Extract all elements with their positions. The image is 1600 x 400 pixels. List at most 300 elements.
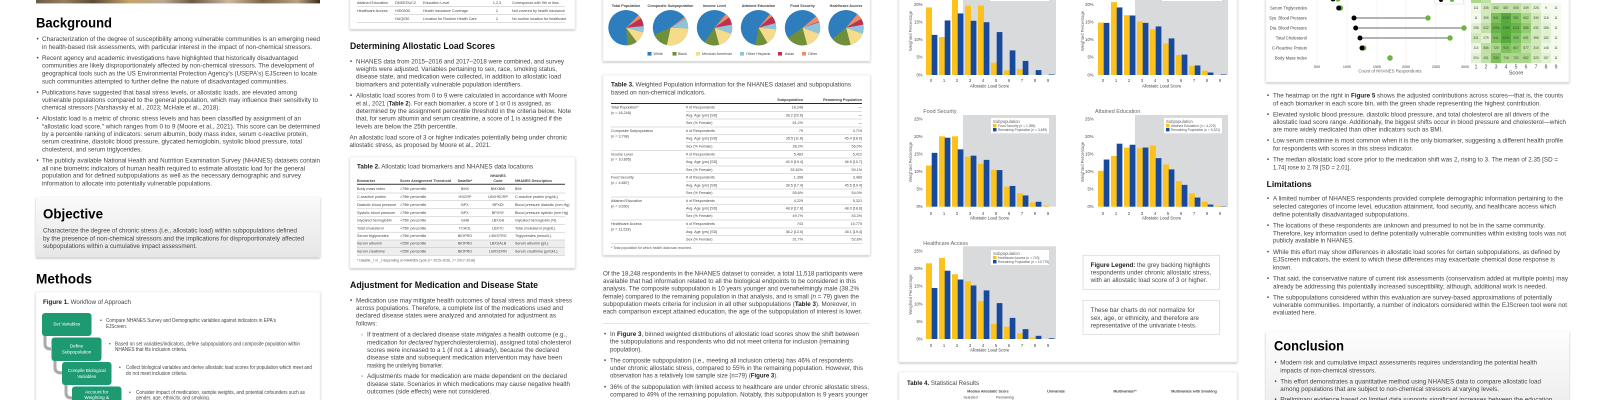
heatmap values: 1054 [1492, 26, 1500, 30]
legend: healthcare access [991, 250, 1049, 265]
table 4 header [963, 390, 1217, 400]
chart: attained education: 0 [1102, 211, 1105, 216]
table 4 header: Multivariate** [1113, 390, 1137, 394]
chart: income level: 0 [1102, 78, 1105, 83]
workflow arrows [45, 335, 72, 398]
table 3 rows: 52.8% [852, 238, 863, 242]
table 3 rows: — [858, 106, 862, 110]
lollipop x axis: 1500 [1373, 65, 1381, 69]
heatmap values: 941 [1493, 36, 1499, 40]
lollipop x axis: 1000 [1343, 65, 1351, 69]
heatmap x axis: 2 [1485, 65, 1488, 71]
lollipop legend [1435, 0, 1463, 4]
table 3 rows: Healthcare Access [611, 222, 642, 226]
heatmap values: 991 [1513, 16, 1519, 20]
table 4 header: Multivariate with Smoking [1171, 390, 1217, 394]
text block: figure 5 bullets: Elevated systolic blood pressure, diastolic blood pressure, and total cholesterol are all drivers of the [1273, 111, 1550, 118]
text block: limitations: While this effort may show differences in allostatic load scores for certain subpopulations, as defined by [1273, 249, 1561, 256]
chart: income level: Weighted Percentage [1080, 10, 1085, 51]
text block: figure 5 bullets: 1.74] rose to 2.78 [SD = 2.01]. [1273, 164, 1351, 171]
chart: income level: 4 [1154, 78, 1157, 83]
heatmap values: 349 [1523, 6, 1529, 10]
heatmap values: 118 [1543, 16, 1549, 20]
panel: ethnicity pie charts [603, 0, 870, 61]
panel: table 1 fragment: DMDEDUC2 [395, 1, 416, 5]
text block: limitations: The locations of these respondents are unknown and presumed to not be in the same community. [1273, 223, 1545, 230]
text block: background bullets: in health-based risk assessments, with particular interest in the impact of non-chemical stressors. [42, 44, 312, 51]
table 4 header: Remaining [996, 396, 1014, 400]
table 3 rows: 5,321 [853, 199, 862, 203]
table 2 rows: >75th percentile [400, 203, 426, 207]
table 3 rows: Avg. Age (yrs) [SD] [686, 113, 717, 117]
table 3 rows: Sex (% Female) [686, 214, 712, 218]
lollipop labels: C-Reactive Protein [1272, 45, 1308, 50]
callout: figure legend: with an allostatic load score of 3 or higher. [1090, 277, 1208, 284]
table 3 rows: (n = 18,248) [611, 111, 631, 115]
heatmap values: 505 [1513, 6, 1519, 10]
table 2 rows: >75th percentile [400, 226, 426, 230]
heatmap values: 258 [1473, 26, 1479, 30]
heatmap [1471, 0, 1561, 76]
chart: food security: 10% [914, 169, 923, 174]
chart: attained education: 9 [1219, 211, 1222, 216]
text block: limitations: That said, the conservative nature of current risk assessments (conservatism added at multiple points) may [1273, 276, 1569, 283]
text block: limitations: vulnerable communities. Importantly, a number of indicators considered within the EJScreen tool were not [1273, 302, 1567, 309]
chart: food security: 1 [943, 211, 946, 216]
heatmap x axis: 5 [1515, 65, 1518, 71]
text block: adjustment: across populations. Therefore, a complete list of the medications used and [356, 305, 563, 312]
table 3 rows: 48.8 [17.8] [786, 207, 803, 211]
chart: healthcare access: 25% [914, 248, 923, 253]
table 3 rows: 79 [799, 129, 803, 133]
heatmap x axis: 6 [1525, 65, 1528, 71]
panel: table 3 [603, 75, 870, 255]
table 3 rows: (n = 10,895) [611, 158, 631, 162]
text block: limitations: A limited number of NHANES respondents provided complete demographic information pertaining to the [1273, 195, 1564, 202]
chart: income level: 3 [1141, 78, 1144, 83]
text block: determining scores: that, for serum albumin and serum creatinine, a score of 1 is assigned if the [356, 116, 563, 123]
workflow step descriptions: EJScreen. [106, 324, 127, 330]
panel: table 1 fragment: Location for Routine Health Care [423, 17, 477, 21]
table 2 rows: TCHOL [459, 226, 471, 230]
lollipop labels: Serum Triglycerides [1270, 5, 1307, 10]
table 3 rows: 3,489 [853, 176, 862, 180]
text block: adjustment [350, 297, 572, 396]
pie legend: Other [808, 52, 818, 56]
panel: table 1 fragment: Health Insurance Coverage [423, 9, 468, 13]
table 2 rows: >75th percentile [400, 234, 426, 238]
table 3 header: Remaining Population [823, 98, 863, 102]
heatmap values: 156 [1543, 26, 1549, 30]
callout: univariate note [1083, 300, 1220, 334]
table 3 rows: 38.5 [17.4] [786, 183, 803, 187]
pie titles: Income Level [703, 4, 726, 8]
text block: determining scores: levels are below the 25th percentile. [356, 123, 457, 130]
text block: results bullets: the subpopulations and respondents who did not meet criteria for inclusion (remaining [610, 339, 849, 346]
table 3 rows: Sex (% Female) [686, 121, 712, 125]
table 4 header: Median Allostatic Score [967, 390, 1009, 394]
table 3 rows: Sex (% Female) [686, 238, 712, 242]
heatmap x axis: 9 [1555, 65, 1558, 71]
heading: Objective: Objective [43, 206, 103, 221]
text block: background bullets: • [36, 55, 39, 62]
chart: attained education: 3 [1141, 211, 1144, 216]
chart: food security: 0% [916, 204, 923, 209]
panel: table 2 [350, 157, 575, 268]
text block: results bullets: • [604, 331, 606, 338]
text block: limitations: EJScreen indicators, the extent to which these differences may exacerbate chemical dose response is [1273, 257, 1555, 264]
text block: determining scores: Allostatic load scores from 0 to 9 were calculated in accordance with Moore [356, 93, 568, 100]
text block: background bullets: vulnerable populations compared to the general population, which may influence their sensitivity to [42, 97, 319, 104]
panel: table 1 fragment: 2 [496, 9, 498, 13]
legend: food security: Remaining Population (n = 3,489) [998, 128, 1047, 132]
text block: background bullets: information to allocate into potentially vulnerable populations. [42, 181, 212, 188]
text block: adjustment: medication for declared hypercholesterolemia), assigned total cholesterol [367, 339, 571, 346]
heading: conclusion: Conclusion [1274, 338, 1344, 354]
pie legend: Other Hispanic [746, 52, 771, 56]
chart: attained education: 0% [1087, 204, 1094, 209]
table 2 rows: Triglycerides (mmol/L) [515, 234, 551, 238]
chart: composite subpopulation [908, 0, 1056, 88]
chart: healthcare access: 10% [914, 301, 923, 306]
chart: attained education: 8 [1206, 211, 1209, 216]
text block: background bullets: • [36, 116, 39, 123]
workflow step descriptions: Collect biological variables and derive allostatic load scores for population which meet and [126, 365, 312, 371]
table 3 rows: 51.2% [793, 121, 804, 125]
chart: attained education: Attained Education [1095, 109, 1140, 115]
text block: results bullets [604, 331, 869, 399]
table 2 rows: LBXSCRN [489, 250, 507, 254]
chart: healthcare access: 1 [943, 343, 946, 348]
chart: income level: 7 [1193, 78, 1196, 83]
lollipop labels: Body Mass Index [1275, 55, 1308, 60]
workflow step boxes: Set Variables [53, 322, 81, 326]
pie titles: Total Population [612, 4, 641, 8]
table 2 rows: Blood pressure systolic (mm Hg) [515, 211, 568, 215]
chart: composite subpopulation: 4 [982, 78, 985, 83]
text block: adjustment: follows: [356, 320, 377, 327]
pie titles: Food Security [790, 4, 816, 8]
chart: food security: 6 [1008, 211, 1011, 216]
table 3 title: Table 3. Weighted Population information for the NHANES dataset and subpopulations [611, 81, 851, 88]
text block: adjustment: • [350, 297, 352, 304]
table 3 rows: 46.5 [10.7] [845, 160, 862, 164]
table 3 rows: Avg. Age (yrs) [SD] [686, 137, 717, 141]
table 3 rows: 49.7% [793, 214, 804, 218]
text block: determining scores: biomarkers and potentially vulnerable population identifiers. [356, 81, 522, 88]
panel: table 4 [899, 372, 1237, 400]
lollipop labels: Dia. Blood Pressure [1270, 25, 1308, 30]
text block: figure 5 bullets: • [1267, 111, 1269, 118]
table 2 rows: LBXSTRG [489, 234, 507, 238]
table 2 rows: Serum creatinine (µmol/L) [515, 250, 558, 254]
heatmap values: 152 [1543, 36, 1549, 40]
table 4 title: Table 4. Statistical Results [907, 380, 979, 387]
callout: figure legend [1083, 255, 1220, 289]
chart: income level: 5% [1087, 55, 1094, 60]
table 3 rows: 4,229 [794, 199, 803, 203]
table 2 rows: BMXBMI [491, 187, 505, 191]
chart: composite subpopulation: 8 [1034, 78, 1037, 83]
text block: background bullets [36, 36, 320, 188]
heatmap values: 807 [1513, 46, 1519, 50]
heatmap values: 11 [1554, 36, 1558, 40]
chart: healthcare access: Allostatic Load Score [970, 348, 1010, 353]
table 2 header: NHANES Description [515, 179, 553, 183]
text block: limitations: selected categories of income level, education attainment, food security, and healthcare access which [1273, 204, 1556, 211]
lollipop x axis: 2500 [1432, 65, 1440, 69]
table 2 header: Code [493, 179, 503, 183]
table 3 rows: (n = 3,798) [611, 134, 629, 138]
workflow step descriptions: • [119, 365, 121, 371]
text block: adjustment: masking the underlying biomarker. [367, 362, 443, 369]
text block: determining scores: et al., 2021 (Table 2). For each biomarker, a score of 1 or 0 is assigned, as [356, 100, 551, 107]
heatmap values: 114 [1473, 46, 1479, 50]
workflow step descriptions: • [109, 342, 111, 348]
chart: healthcare access: 0% [916, 336, 923, 341]
table 3 rows: Avg. Age (yrs) [SD] [686, 230, 717, 234]
chart: food security: 15% [914, 151, 923, 156]
panel: table 1 fragment: Corresponds with 9th or less [512, 1, 559, 5]
table 3 rows: 5,412 [853, 152, 862, 156]
chart: food security: 7 [1021, 211, 1024, 216]
table 3 rows: 55.6% [793, 191, 804, 195]
chart: attained education [1080, 109, 1228, 220]
lollipop labels [1269, 5, 1308, 60]
heading: Background: Background [36, 16, 112, 30]
text block: figure 5 bullets: Low serum creatinine is most common when it is the only biomarker, suggesting a different health profile [1273, 138, 1564, 145]
text block: limitations: • [1267, 195, 1269, 202]
callout: figure legend: Figure Legend: the grey backing highlights [1091, 262, 1210, 269]
chart: attained education: 1 [1115, 211, 1118, 216]
table 2 rows: Serum triglycerides [357, 234, 389, 238]
table 2 rows: >75th percentile [400, 187, 426, 191]
heatmap values: 886 [1523, 26, 1529, 30]
table 3 rows: Avg. Age (yrs) [SD] [686, 207, 717, 211]
text block: background bullets: • [36, 89, 39, 96]
table 2 rows: Glycated hemoglobin (%) [515, 219, 556, 223]
table 2 rows: Systolic blood pressure [357, 211, 395, 215]
heatmap values: 452 [1493, 6, 1499, 10]
chart: attained education: 5 [1167, 211, 1170, 216]
chart: composite subpopulation: 3 [969, 78, 972, 83]
chart: food security: 3 [969, 211, 972, 216]
legend: healthcare access: Healthcare Access (n = 743) [998, 256, 1040, 260]
chart: composite subpopulation: 20% [914, 2, 923, 7]
text block: background bullets: Allostatic load is a metric of chronic stress levels and has been classified by assignment of an [42, 116, 301, 123]
text block: background bullets: such communities attempted to further define the nature of disadvantaged communities. [42, 78, 288, 85]
text block: limitations: • [1267, 223, 1269, 230]
text block: determining scores: weights were adjusted. Variables pertaining to sex, race, smoking status, [355, 66, 557, 73]
table 3 rows: 10,775 [851, 222, 862, 226]
text block: limitations: The subpopulations considered within this evaluation are survey-based approximations of potentially [1273, 295, 1553, 302]
text block: limitations: • [1267, 276, 1269, 283]
chart: composite subpopulation: 5 [995, 78, 998, 83]
table 2 rows: >75th percentile [400, 195, 426, 199]
chart: food security: Weighted Percentage [908, 141, 913, 182]
text block: results bullets: population). [610, 346, 642, 353]
text block: limitations: publicly available in NHANES. [1273, 238, 1354, 245]
text block: figure 5 bullets: • [1267, 157, 1269, 164]
table 2 rows: Diastolic blood pressure [357, 203, 396, 207]
heatmap values: 323 [1533, 56, 1539, 60]
workflow step boxes: Compile Biological [68, 368, 106, 373]
lollipop x axis [1314, 65, 1469, 69]
heatmap values: 335 [1483, 6, 1489, 10]
text block: background bullets: population and for defined subpopulations as well as the necessary demographic and survey [42, 173, 302, 180]
chart: food security: 4 [982, 211, 985, 216]
text block: background bullets: Characterization of the degree of susceptibility among vulnerable communities is an emerging need [42, 36, 320, 43]
table 3 rows: 1,398 [794, 176, 803, 180]
table 2 rows: Glycated hemoglobin [357, 219, 392, 223]
table 3 rows: 18,248 [792, 106, 803, 110]
chart: food security: 5 [995, 211, 998, 216]
table 3 rows: — [858, 113, 862, 117]
panel: table 1 fragment [350, 0, 575, 29]
workflow step boxes: Variables [77, 374, 97, 379]
table 2 rows: BIOPRO [458, 234, 472, 238]
text block: objective statement: Characterize the degree of chronic stress (i.e., allostatic load) within subpopulations defined [43, 228, 297, 235]
callout: univariate note: sex, age, or ethnicity, and therefore are [1091, 315, 1200, 322]
pie titles: Healthcare Access [830, 4, 862, 8]
text block: determining scores: determined by the assignment percentile threshold in the criteria below. Note [356, 108, 572, 115]
chart: healthcare access [908, 241, 1056, 353]
lollipop x axis: 3000 [1461, 65, 1469, 69]
text block: determining scores [350, 58, 572, 149]
pie legend: Mexican American [702, 52, 732, 56]
callout: univariate note: These bar charts do not normalize for [1091, 307, 1195, 314]
chart: healthcare access: 9 [1047, 343, 1050, 348]
text block: figure 5 bullets: • [1267, 138, 1269, 145]
legend: food security: Subpopulation [993, 119, 1020, 124]
chart: composite subpopulation: 7 [1021, 78, 1024, 83]
heatmap values: 111 [1474, 6, 1479, 10]
table 2 rows: GHB [461, 219, 470, 223]
heatmap values: 225 [1533, 6, 1539, 10]
heatmap values: 720 [1493, 46, 1499, 50]
chart: composite subpopulation: 2 [956, 78, 959, 83]
legend: attained education: Attained Education (n = 4,229) [1171, 124, 1216, 128]
legend: attained education: Remaining Population (n = 5,321) [1171, 128, 1220, 132]
text block: background bullets: serum creatinine, diastolic blood pressure, glycated hemoglobin, systolic blood pressure, total [42, 139, 302, 146]
table 3 rows: Avg. Age (yrs) [SD] [686, 183, 717, 187]
heatmap values: 716 [1503, 56, 1509, 60]
text block: background bullets: Recent agency and academic investigations have highlighted that historically disadvantaged [42, 55, 298, 62]
chart: income level: 0% [1087, 72, 1094, 77]
table 2 rows: BIOPRO [458, 250, 472, 254]
chart: healthcare access: Healthcare Access [923, 241, 968, 247]
text block: results paragraph: Of the 18,248 respondents in the NHANES dataset to consider, a total 11,518 participants were [603, 270, 863, 277]
table 2 rows [357, 187, 570, 254]
heatmap values: 1226 [1502, 16, 1510, 20]
table 2 rows: LBXTC [492, 226, 504, 230]
table 3 rows: Food Security [611, 176, 634, 180]
text block: figure 5 bullets: for respondents with scores in this stress indicator. [1273, 146, 1413, 153]
chart: attained education: 6 [1180, 211, 1183, 216]
pie: attained education [741, 10, 776, 45]
panel: figure 3 bar charts [899, 0, 1237, 362]
panel: table 1 fragment: No routine location for healthcare [512, 17, 566, 21]
pie: income level [697, 10, 732, 45]
text block: adjustment: disease state and subsequent medication intervention may have been [367, 355, 562, 362]
heatmap x axis: 1 [1475, 65, 1478, 71]
chart: healthcare access: 3 [969, 343, 972, 348]
table 2 rows: BPXDI [492, 203, 504, 207]
chart: food security: 20% [914, 134, 923, 139]
table 2 footnote: * Datafile _I or _J depending on NHANES cycle (I = 2015–2016, J = 2017–2018) [357, 258, 475, 262]
pie legend: Black [678, 52, 687, 56]
heatmap values: 941 [1493, 16, 1499, 20]
heading: Methods: Methods [36, 272, 92, 287]
panel: table 1 fragment: HID030D [395, 9, 411, 13]
heatmap values: 432 [1533, 26, 1539, 30]
table 2 rows: BMI [515, 187, 522, 191]
workflow step descriptions: Compare NHANES Survey and Demographic variables against indicators in EPA's [106, 318, 276, 324]
table 4 header: Univariate [1047, 390, 1065, 394]
chart: attained education: 10% [1085, 169, 1094, 174]
text block: background bullets: • [36, 36, 39, 43]
heatmap values: 587 [1503, 6, 1509, 10]
heatmap values: 662 [1523, 16, 1529, 20]
text block: figure 5 bullets: • [1267, 93, 1269, 100]
heatmap values: 915 [1503, 46, 1509, 50]
table 2 rows: <25th percentile [400, 250, 426, 254]
text block: results paragraph: each comparison except attained education, the age of the subpopulation of interest is lower. [603, 309, 862, 316]
pie: composite subpopulation [653, 10, 688, 45]
heatmap values: 930 [1513, 36, 1519, 40]
table 3 rows: — [858, 121, 862, 125]
chart: composite subpopulation: 15% [914, 19, 923, 24]
table 3 rows: Sex (% Female) [686, 144, 712, 148]
table 3 rows: 31.7% [793, 238, 804, 242]
workflow step boxes: Weighting & [84, 395, 109, 400]
panel: table 1 fragment: HUQ030 [395, 17, 409, 21]
pie legend: White [654, 52, 663, 56]
chart: composite subpopulation: 5% [916, 55, 923, 60]
callout: univariate note: representative of the univariate t-tests. [1091, 323, 1197, 330]
workflow step boxes: Subpopulation [62, 350, 92, 354]
table 2 rows: BPX [461, 211, 469, 215]
heatmap x axis: Score [1509, 70, 1523, 76]
table 3 rows: Composite Subpopulation [611, 129, 653, 133]
heading: determining scores: Determining Allostatic Load Scores [350, 41, 495, 51]
chart: food security: 5% [916, 186, 923, 191]
heatmap values: 11 [1554, 26, 1558, 30]
text block: background bullets: communities are likely disproportionately affected by non-chemical stressors. The development of [42, 63, 314, 70]
text block: determining scores: • [350, 93, 352, 100]
heatmap values: 662 [1523, 56, 1529, 60]
heatmap x axis [1475, 65, 1558, 76]
text block: conclusion bullets [1274, 360, 1552, 400]
pie titles [612, 4, 862, 8]
pie: total population [608, 10, 644, 45]
panel: figure 5 lollipop and heatmap: Count of NHANES Respondents [1358, 69, 1422, 74]
table 3 rows: 53.62% [790, 168, 804, 172]
text block: background bullets: The publicly available National Health and Nutrition Examination Survey (NHANES) datasets contain [42, 157, 320, 164]
chart: composite subpopulation: 10% [914, 37, 923, 42]
table 2 rows: LBXSALB [490, 242, 507, 246]
heading: limitations: Limitations [1267, 179, 1312, 189]
table 3 rows: 35.5 [11.8] [786, 137, 803, 141]
table 2 rows: Serum albumin (g/L) [515, 242, 548, 246]
chart: healthcare access: 5 [995, 343, 998, 348]
text block: determining scores: • [350, 58, 352, 65]
chart: attained education: 5% [1087, 186, 1094, 191]
workflow step boxes: Define [70, 344, 84, 348]
text block: background bullets: • [36, 157, 39, 164]
panel: table 1 fragment: Healthcare Access [357, 9, 388, 13]
text block: results bullets: observation has a relatively low sample size (n=79) (Figure 3). [610, 373, 778, 380]
